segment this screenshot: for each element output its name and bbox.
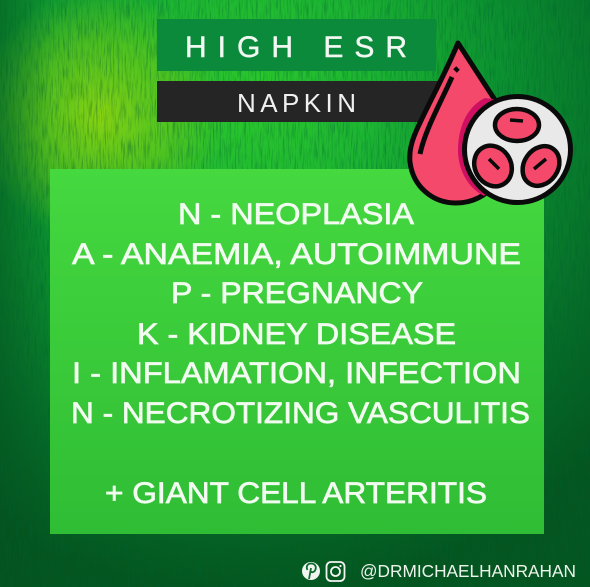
line: K - Kidney Disease: K - KIDNEY DISEASE xyxy=(137,318,456,351)
line: I - Inflamation, Infection: I - INFLAMATION, INFECTION xyxy=(72,357,521,390)
icon: pinterest xyxy=(302,562,320,580)
title banner: HIGH ESR xyxy=(157,19,436,71)
icon: instagram xyxy=(326,562,344,581)
icon: blood drop with red cells xyxy=(410,43,570,203)
title banner: HIGH ESR: HIGH ESR xyxy=(185,31,407,64)
subtitle banner: NAPKIN: NAPKIN xyxy=(237,88,356,118)
icon: red cell right xyxy=(515,139,567,193)
panel: NAPKIN mnemonic list xyxy=(50,169,544,534)
line: + Giant Cell Arteritis: + GIANT CELL ARTERITIS xyxy=(105,477,487,510)
subtitle banner: NAPKIN xyxy=(157,81,439,122)
footer: social handle xyxy=(302,561,576,581)
line: N - Necrotizing Vasculitis: N - NECROTIZING VASCULITIS xyxy=(71,397,530,430)
icon: red cell left xyxy=(467,139,519,193)
line: N - Neoplasia: N - NEOPLASIA xyxy=(178,198,414,231)
handle text: @DRMICHAELHANRAHAN xyxy=(360,561,576,581)
icon: red cell top xyxy=(495,109,539,141)
icon: petri circle with three red cells xyxy=(464,96,570,202)
icon: blood drop xyxy=(410,43,500,203)
line: A - Anaemia, Autoimmune: A - ANAEMIA, AUTOIMMUNE xyxy=(72,238,521,271)
line: P - Pregnancy: P - PREGNANCY xyxy=(171,277,423,310)
